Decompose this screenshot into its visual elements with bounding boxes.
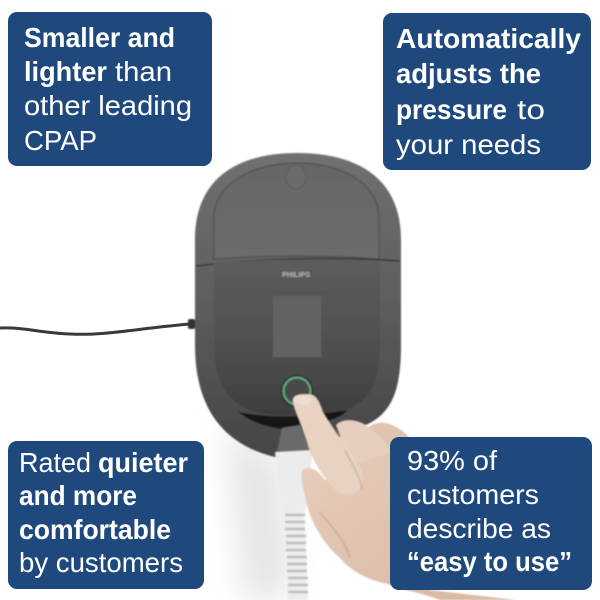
cable connector [188, 319, 195, 329]
middle finger [336, 420, 400, 490]
panel: smaller and lighter: other leading [24, 90, 192, 121]
panel: easy to use: describe as [407, 513, 551, 544]
icon: CPAP device [188, 153, 401, 457]
panel: smaller and lighter: CPAP [24, 125, 97, 156]
panel: quieter and more comfortable: by customers [19, 547, 183, 578]
panel: smaller and lighter: lighter [24, 56, 107, 87]
device lid [214, 163, 379, 259]
panel: automatically adjusts: pressure [396, 94, 507, 125]
glossy lower edge [238, 410, 348, 430]
panel: automatically adjusts: Automatically [396, 23, 581, 54]
knuckle shading [320, 450, 362, 558]
display window [273, 296, 321, 357]
index finger [293, 394, 363, 495]
device front face [214, 259, 380, 416]
soft shadow under device [225, 425, 290, 600]
panel: smaller and lighter: Smaller and [24, 22, 175, 53]
panel: quieter and more comfortable: comfortable [19, 514, 171, 545]
power cable [0, 324, 190, 334]
panel: automatically adjusts: adjusts the [396, 58, 541, 89]
panel: easy to use [390, 437, 592, 590]
fingernail [294, 395, 312, 405]
panel: automatically adjusts: to [517, 94, 545, 125]
lid notch [286, 165, 306, 189]
panel: quieter and more comfortable: quieter [98, 447, 188, 478]
panel: automatically adjusts [383, 13, 591, 170]
panel: quieter and more comfortable: and more [19, 480, 137, 511]
logo: PHILIPS [282, 272, 310, 279]
panel: easy to use: 93% of [407, 445, 497, 476]
panel: easy to use: customers [407, 479, 539, 510]
panel: easy to use: “easy to use” [407, 546, 572, 577]
ring finger [368, 423, 420, 470]
panel: smaller and lighter: than [115, 56, 172, 87]
panel: automatically adjusts: your needs [396, 129, 541, 160]
icon: hand [293, 394, 516, 600]
tube collar [276, 425, 312, 457]
panel: quieter and more comfortable: Rated [19, 447, 91, 478]
panel: smaller and lighter [8, 12, 212, 166]
panel: quieter and more comfortable [8, 441, 204, 589]
palm and thumb [301, 450, 516, 600]
icon: corrugated hose [275, 450, 312, 600]
power button [281, 375, 313, 407]
